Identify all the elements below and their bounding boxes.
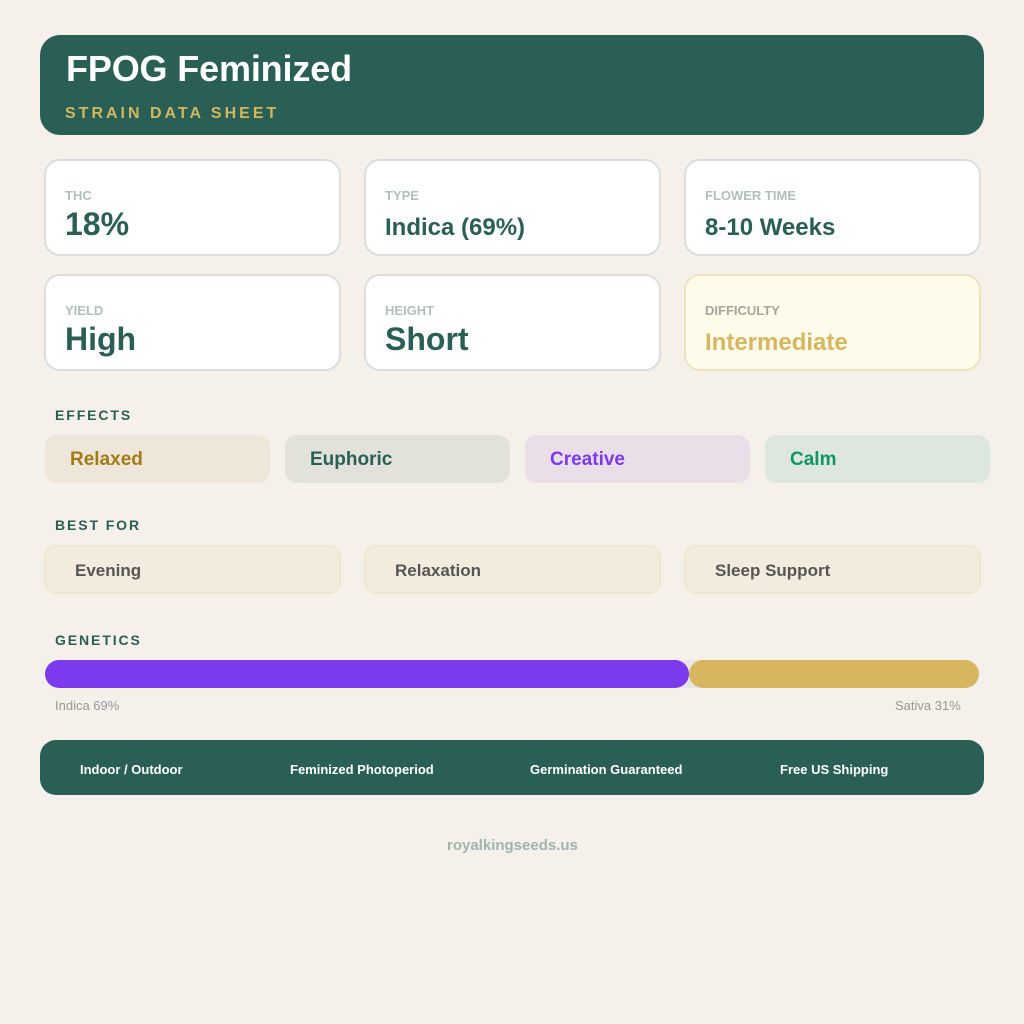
effect pill: relaxed: Relaxed [70,449,143,470]
value: high: High [65,321,136,357]
feature: feminized photoperiod: Feminized Photoperiod [290,762,434,777]
value: short: Short [385,321,469,357]
indica segment [45,660,689,688]
best-for pill: sleep support [684,545,981,594]
section heading: effects: EFFECTS [55,407,132,423]
stat card: flower time [684,159,981,256]
effect pill: relaxed [45,435,270,483]
effect pill: euphoric: Euphoric [310,449,392,470]
subtitle: STRAIN DATA SHEET [65,105,279,122]
title: FPOG Feminized [66,48,352,89]
best-for pill: evening: Evening [75,561,141,580]
header banner [40,35,984,135]
effect pill: calm: Calm [790,449,836,470]
feature: free US shipping: Free US Shipping [780,762,888,777]
effect pill: creative [525,435,750,483]
website: royalkingseeds.us [447,837,578,854]
effect pill: creative: Creative [550,449,625,470]
footer feature bar [40,740,984,795]
feature: indoor outdoor: Indoor / Outdoor [80,762,183,777]
effect pill: euphoric [285,435,510,483]
effect pill: calm [765,435,990,483]
best-for pill: evening [44,545,341,594]
label: height: HEIGHT [385,303,434,318]
section heading: best for: BEST FOR [55,517,141,533]
feature: germination guaranteed: Germination Guaranteed [530,762,682,777]
label: indica percent: Indica 69% [55,698,119,713]
label: type: TYPE [385,188,419,203]
label: sativa percent: Sativa 31% [895,698,961,713]
genetics bar [45,660,979,688]
stat card: difficulty [684,274,981,371]
stat card: type [364,159,661,256]
best-for pill: sleep support: Sleep Support [715,561,830,580]
section heading: genetics: GENETICS [55,632,142,648]
label: THC: THC [65,188,92,203]
label: yield: YIELD [65,303,103,318]
best-for pill: relaxation [364,545,661,594]
stat card: THC [44,159,341,256]
label: flower time: FLOWER TIME [705,188,796,203]
value: 18%: 18% [65,206,129,242]
best-for pill: relaxation: Relaxation [395,561,481,580]
stat card: height [364,274,661,371]
value: 8-10 weeks: 8-10 Weeks [705,214,835,241]
value: intermediate: Intermediate [705,329,848,356]
value: Indica 69%: Indica (69%) [385,214,525,241]
stat card: yield [44,274,341,371]
sativa segment [689,660,979,688]
label: difficulty: DIFFICULTY [705,303,780,318]
